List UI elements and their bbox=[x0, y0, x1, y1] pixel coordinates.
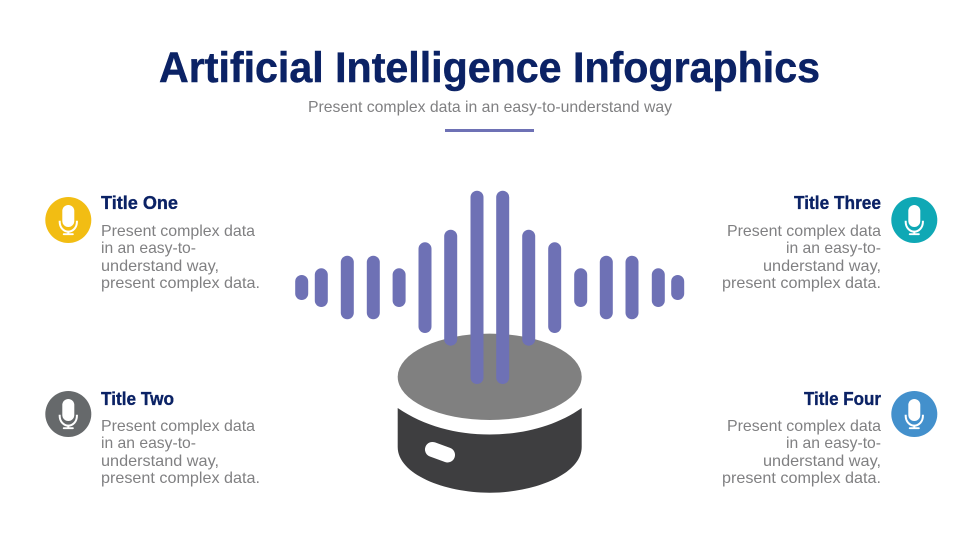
icon: grey microphone bbox=[45, 391, 91, 437]
text block: title two: in an easy-to- bbox=[101, 435, 196, 452]
subtitle: Present complex data in an easy-to-understand way bbox=[308, 99, 672, 116]
text block: title four: Present complex data bbox=[727, 418, 881, 435]
text block: title three: in an easy-to- bbox=[786, 240, 881, 257]
text block: title four: in an easy-to- bbox=[786, 435, 881, 452]
text block: title one: present complex data. bbox=[101, 275, 260, 292]
text block: title four: understand way, bbox=[763, 453, 881, 470]
text block: title one: Present complex data bbox=[101, 223, 255, 240]
panel: title four bbox=[722, 388, 937, 487]
panel: title three bbox=[722, 192, 937, 292]
text block: title two: present complex data. bbox=[101, 470, 260, 487]
heading: title four: Title Four bbox=[804, 388, 881, 409]
text block: title three: understand way, bbox=[763, 258, 881, 275]
text block: title one: in an easy-to- bbox=[101, 240, 196, 257]
text block: title three bbox=[722, 223, 881, 292]
text block: title two: understand way, bbox=[101, 453, 219, 470]
text block: title three: present complex data. bbox=[722, 275, 881, 292]
text block: title four bbox=[722, 418, 881, 487]
icon: yellow microphone bbox=[45, 197, 91, 243]
speaker body bbox=[398, 408, 582, 493]
text block: title four: present complex data. bbox=[722, 470, 881, 487]
smart speaker illustration bbox=[295, 191, 684, 493]
text block: title three: Present complex data bbox=[727, 223, 881, 240]
title underline bbox=[445, 129, 534, 132]
text block: title two bbox=[101, 418, 260, 487]
panel: title two bbox=[45, 388, 260, 487]
heading: title two: Title Two bbox=[101, 388, 174, 409]
sound wave bars bbox=[295, 191, 684, 384]
text block: title one bbox=[101, 223, 260, 292]
speaker top bbox=[398, 334, 582, 420]
panel: title one bbox=[45, 192, 260, 292]
title: Artificial Intelligence Infographics bbox=[159, 44, 820, 92]
speaker button bbox=[423, 440, 457, 465]
text block: title two: Present complex data bbox=[101, 418, 255, 435]
icon: blue microphone bbox=[891, 391, 937, 437]
text block: title one: understand way, bbox=[101, 258, 219, 275]
icon: teal microphone bbox=[891, 197, 937, 243]
heading: title one: Title One bbox=[101, 192, 178, 213]
heading: title three: Title Three bbox=[794, 192, 881, 213]
